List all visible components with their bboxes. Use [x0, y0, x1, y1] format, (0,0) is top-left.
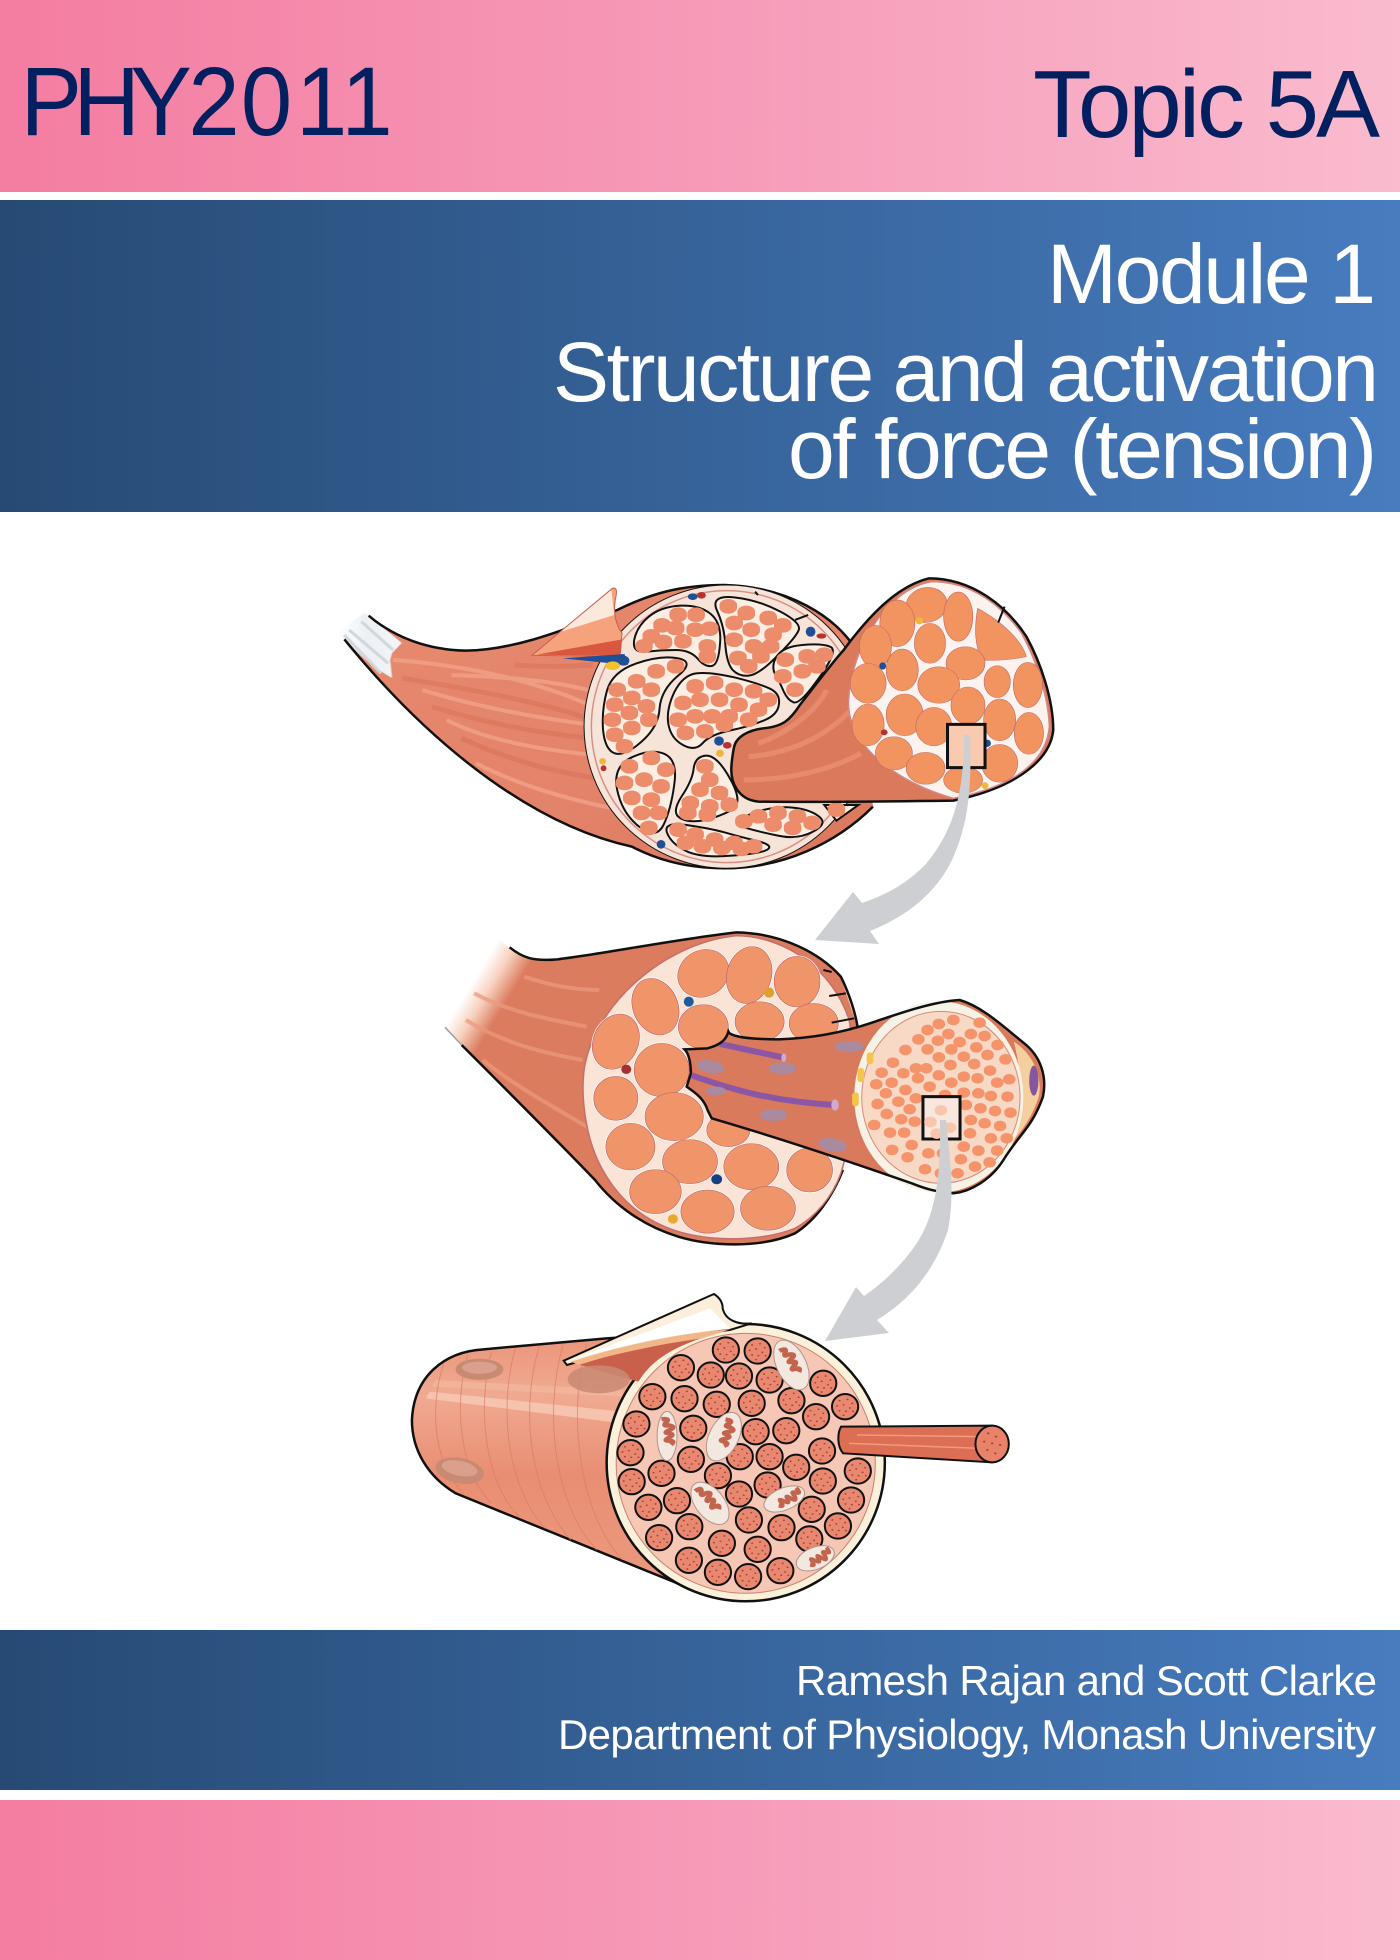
fascicle outlines [603, 597, 858, 856]
fascicle body [445, 932, 858, 1244]
fascicle end face [849, 582, 1049, 798]
fibre end-face [862, 1011, 1020, 1183]
fibres in disc [586, 944, 838, 1233]
muscle streaks [393, 660, 612, 808]
extracted fascicle [731, 578, 1053, 802]
connective tissue flap [532, 588, 622, 657]
panel: fascicle with fibre [445, 932, 1044, 1244]
nerve and vessel bundle [563, 654, 629, 670]
muscle outline [344, 585, 873, 868]
blue title band [0, 200, 1400, 512]
sarcolemma nuclei [432, 1359, 503, 1488]
vessels in disc [621, 988, 774, 1224]
yellow satellite marks [855, 1055, 870, 1104]
module title block [553, 227, 1379, 496]
end-face ring [607, 1324, 885, 1601]
muscle body [342, 585, 873, 868]
cross-section disc [584, 585, 870, 868]
arrow: muscle to fascicle [815, 735, 970, 944]
sarcomere stripes [436, 1343, 623, 1560]
top pink header band [0, 0, 1400, 192]
epimysium ring [591, 591, 862, 863]
vessels on fascicle face [879, 617, 991, 789]
myofibrils [617, 1337, 871, 1589]
topic label Topic 5A: Topic 5A [1033, 51, 1380, 158]
fibre end-face ring [854, 1001, 1023, 1193]
bottom blue credits band [0, 1630, 1400, 1790]
tick marks [823, 970, 854, 1023]
mitochondria [657, 1336, 840, 1576]
arrow: fascicle to fibre [825, 1120, 952, 1341]
body streaks [466, 977, 599, 1127]
authors and department credits [558, 1657, 1377, 1758]
nuclei ovals [695, 1041, 864, 1154]
blood vessels in disc [599, 592, 826, 849]
tendon [339, 613, 402, 678]
module title block: of force (tension) [788, 402, 1377, 496]
peeled sarcolemma flap [564, 1294, 752, 1382]
muscle fibre bundles [612, 605, 836, 850]
end-face interior [616, 1333, 875, 1593]
authors and department credits: Ramesh Rajan and Scott Clarke [796, 1657, 1377, 1704]
panel: whole muscle cross-section with fascicle [339, 578, 1053, 868]
module title block: Module 1 [1047, 227, 1376, 321]
illustration: muscle, fascicle and fibre [339, 578, 1053, 1601]
magnification box [948, 724, 985, 768]
body outline [462, 932, 858, 1244]
single myofibril rod [838, 1426, 1009, 1462]
purple nerve rods [692, 1044, 839, 1111]
fascicle shading [744, 690, 861, 780]
myofibril dots [874, 1020, 1010, 1174]
muscle fibres on end face [850, 586, 1043, 793]
fibre halos [586, 944, 838, 1233]
large nucleus [568, 1365, 630, 1393]
magnification box [923, 1097, 960, 1139]
end-face disc [583, 936, 854, 1239]
course code PHY2011: PHY2011 [21, 48, 393, 157]
authors and department credits: Department of Physiology, Monash University [558, 1711, 1376, 1758]
bundle outline [685, 1000, 1044, 1193]
body outline fade [445, 1027, 462, 1045]
light sarcomere bands [426, 1380, 623, 1423]
panel: muscle fibre with myofibrils [412, 1294, 1009, 1601]
bottom pink band [0, 1800, 1400, 1960]
tick marks [755, 592, 1005, 623]
module title block: Structure and activation [553, 325, 1379, 419]
tan end cap [1014, 1042, 1040, 1140]
fibre body [412, 1330, 797, 1593]
purple vessel in cap [1029, 1066, 1038, 1096]
extracted fibre bundle [685, 1000, 1044, 1193]
